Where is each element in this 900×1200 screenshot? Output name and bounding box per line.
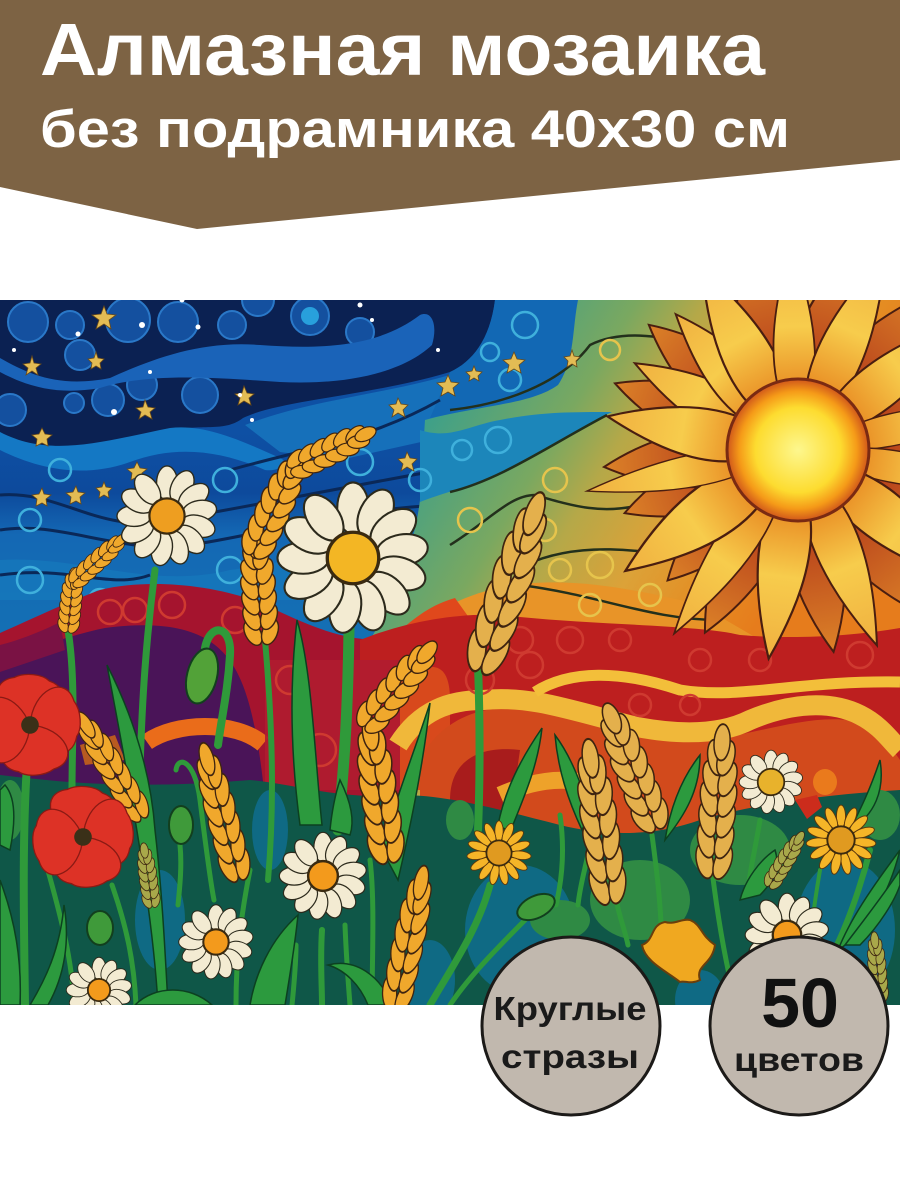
daisy right	[739, 750, 803, 814]
yellow flower right	[806, 805, 876, 875]
sun	[584, 300, 900, 662]
header banner	[0, 0, 900, 229]
warm band outlines	[450, 336, 720, 620]
warm sky	[370, 300, 900, 800]
yellow flower centre	[467, 821, 531, 885]
small orange flower	[795, 769, 837, 819]
night sky	[0, 300, 578, 639]
badge: round rhinestones	[482, 937, 660, 1115]
green buds	[87, 806, 559, 945]
badge: 50 colours: цветов	[734, 1041, 864, 1078]
badge: round rhinestones: стразы	[501, 1038, 639, 1075]
daisy top left	[117, 466, 218, 567]
upper bright band	[0, 314, 434, 391]
turquoise band	[420, 412, 612, 502]
poppy bud	[184, 648, 220, 704]
orange flower	[642, 920, 715, 982]
orange band	[458, 582, 753, 636]
painting	[0, 300, 900, 1005]
daisy bottom left	[66, 956, 132, 1005]
title: Алмазная мозаика	[40, 8, 766, 91]
badge: 50 colours	[710, 937, 888, 1115]
poppy lower	[32, 786, 134, 888]
sun disc	[727, 379, 869, 521]
subtitle: без подрамника 40х30 см	[40, 100, 790, 159]
meadow	[0, 775, 900, 1030]
hills	[0, 584, 900, 840]
daisy lower	[179, 905, 254, 980]
wheat ears	[54, 414, 891, 1019]
daisy bottom right	[744, 892, 829, 951]
daisy large	[277, 482, 430, 635]
poppy upper	[0, 674, 86, 781]
badge: 50 colours: 50	[761, 964, 839, 1042]
orange arc	[147, 726, 263, 744]
swirls	[17, 312, 661, 616]
gold stars	[12, 300, 581, 507]
stems and leaves	[0, 570, 900, 1005]
sun rays	[584, 300, 900, 662]
band outlines	[0, 400, 440, 580]
badge: round rhinestones: Круглые	[494, 990, 646, 1027]
extra grass	[46, 872, 74, 998]
daisy centre bottom	[279, 832, 368, 921]
